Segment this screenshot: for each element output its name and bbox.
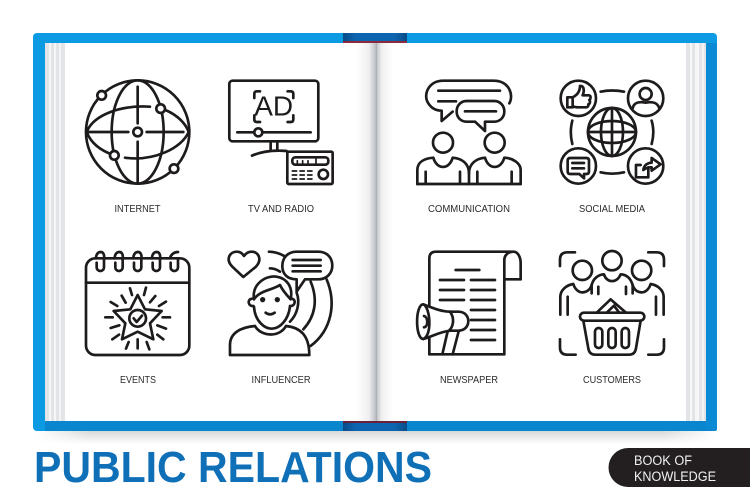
panel: tv and radio [229,81,333,215]
spine band bottom [343,422,407,431]
book cover [33,33,717,431]
label: INFLUENCER [252,375,310,386]
label: COMMUNICATION [428,204,510,215]
label: EVENTS [120,375,156,386]
panel: internet [86,80,189,215]
centre fold shadow [356,43,393,421]
title: PUBLIC RELATIONS [34,443,432,492]
icon: customers with basket [560,251,664,355]
icon: social network [561,81,663,184]
icon: calendar with star [86,252,189,355]
panel: influencer [229,252,332,386]
badge: book of knowledge: BOOK OF [634,453,692,468]
icon: two people talking [417,81,521,184]
panel: events [86,252,189,386]
spine band top [343,33,407,42]
right page edges [686,43,706,421]
label: NEWSPAPER [440,375,498,386]
open book [33,33,717,444]
panel: newspaper [417,252,521,386]
icon: newspaper and megaphone [417,252,521,354]
icon: tv and radio: AD [254,90,293,121]
panel: customers [560,251,664,386]
label: CUSTOMERS [583,375,641,386]
badge: book of knowledge [608,448,750,487]
label: SOCIAL MEDIA [579,204,645,215]
label: INTERNET [114,204,160,215]
icon: globe [86,80,189,184]
icon: influencer [229,252,332,355]
badge: book of knowledge: KNOWLEDGE [634,469,716,484]
pages [45,43,706,421]
panel: communication [417,81,521,215]
left page edges [45,43,65,421]
label: TV AND RADIO [248,204,314,215]
panel: social media [561,81,663,215]
